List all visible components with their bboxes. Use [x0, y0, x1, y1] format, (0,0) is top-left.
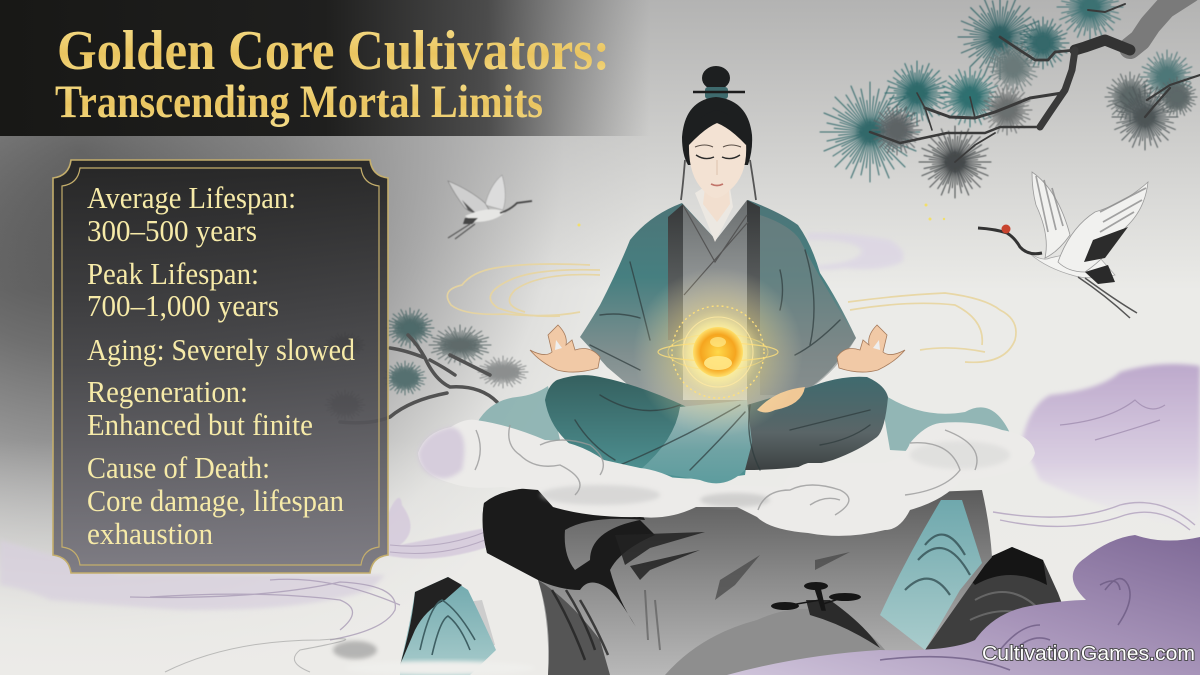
left hand [530, 325, 600, 372]
title: Transcending Mortal Limits [55, 76, 543, 128]
small hill [665, 609, 900, 675]
dark collar strips [668, 200, 760, 340]
flowing sash [477, 386, 1013, 451]
hair [681, 66, 756, 200]
right hand [837, 325, 905, 372]
stat: peak lifespan [87, 257, 279, 323]
sleeve folds [590, 250, 840, 370]
central rock outcrop [483, 488, 992, 675]
stat: regeneration: Regeneration: [87, 375, 248, 409]
clouds under figure [418, 420, 1035, 536]
crane: flying right [978, 172, 1148, 318]
title [55, 20, 610, 128]
stat: peak lifespan: 700–1,000 years [87, 289, 279, 323]
wing far [485, 175, 505, 210]
pine branches [870, 0, 1200, 162]
teal rock face [880, 500, 982, 650]
stat: regeneration [87, 375, 313, 442]
right leg [745, 377, 888, 470]
inner robe [683, 200, 747, 400]
pine needle clusters [820, 0, 1197, 198]
crane: small left [448, 175, 532, 239]
right sleeve grey [760, 215, 856, 395]
stat: regeneration: Enhanced but finite [87, 408, 313, 442]
cultivator figure [477, 66, 1013, 483]
crane front wing [1058, 182, 1148, 272]
teal and ink peaks right [925, 547, 1070, 660]
central drape [640, 400, 752, 483]
left leg [545, 375, 750, 479]
foot [757, 387, 805, 412]
stat: average lifespan [87, 181, 296, 248]
watermark: CultivationGames.com [982, 643, 1195, 665]
stat: cause of death [87, 451, 344, 551]
crane body [1028, 252, 1115, 278]
purple cloud: right [993, 364, 1200, 530]
distant pine: left [325, 308, 528, 423]
face [685, 110, 749, 198]
small pine on rock [771, 582, 861, 610]
title band [0, 0, 650, 136]
sparkles [578, 204, 945, 226]
title: Golden Core Cultivators: [57, 20, 610, 82]
stat: peak lifespan: Peak Lifespan: [87, 257, 259, 291]
purple cloud: bottom right [727, 535, 1200, 675]
stat: average lifespan: 300–500 years [87, 214, 257, 248]
wing near [448, 181, 492, 216]
stat: cause of death: Cause of Death: [87, 451, 270, 485]
purple mist: lower left [0, 498, 485, 672]
pine tree: branches and needles [820, 0, 1200, 198]
distant teal peak left [333, 577, 535, 675]
robe torso [580, 200, 856, 420]
crane rear wing [1032, 172, 1070, 258]
body [465, 209, 505, 222]
gold mist wisps [447, 264, 1016, 362]
stat: average lifespan: Average Lifespan: [87, 181, 296, 215]
stat: aging: Aging: Severely slowed [87, 333, 355, 367]
leg folds [575, 395, 870, 470]
stats panel [53, 160, 388, 573]
neck and collar [695, 188, 733, 242]
stat: cause of death: Core damage, lifespan [87, 484, 344, 518]
stat: cause of death: exhaustion [87, 517, 213, 551]
golden core [633, 267, 803, 437]
lilac wisp behind figure [808, 233, 904, 270]
